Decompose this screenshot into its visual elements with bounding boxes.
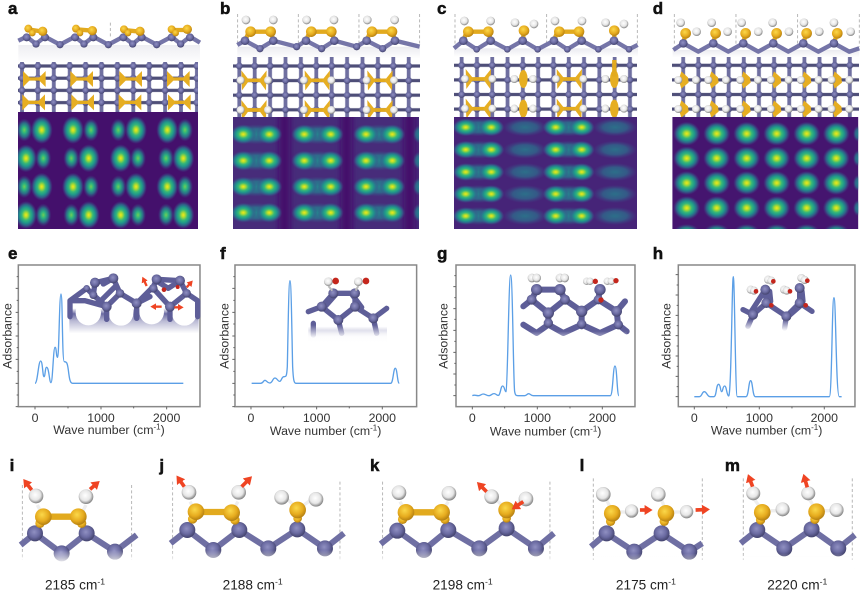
top view d bbox=[672, 57, 859, 118]
x axis title f: ) bbox=[377, 424, 381, 438]
frequency m: -1 bbox=[820, 577, 827, 587]
y axis title f: Adsorbance bbox=[217, 303, 231, 369]
arrows m bbox=[750, 480, 807, 487]
inset structure h bbox=[741, 273, 813, 341]
panel j: 2188 mode bbox=[158, 456, 344, 592]
x tick labels e: 0 bbox=[32, 411, 39, 425]
panel d: all single sites bbox=[653, 0, 863, 240]
y axis title g: Adsorbance bbox=[436, 303, 450, 369]
frequency i: -1 bbox=[97, 577, 105, 587]
frequency l: -1 bbox=[668, 577, 676, 587]
x tick labels e: 1000 bbox=[87, 411, 115, 425]
top view a bbox=[18, 62, 198, 112]
x axis title h: -1 bbox=[811, 423, 819, 432]
x axis title g: -1 bbox=[590, 424, 598, 433]
x tick labels g bbox=[469, 411, 616, 425]
panel m: 2220 mode bbox=[725, 456, 855, 592]
spectrum curve e bbox=[35, 294, 183, 383]
panel l: 2175 mode bbox=[580, 456, 703, 592]
label f: f bbox=[220, 244, 226, 263]
inset structure e bbox=[69, 270, 199, 338]
label g: g bbox=[437, 244, 447, 263]
frequency j: -1 bbox=[275, 577, 283, 587]
x tick labels g: 0 bbox=[469, 411, 476, 425]
frequency j: 2188 cm bbox=[223, 577, 275, 592]
label m: m bbox=[725, 456, 740, 475]
x tick labels h: 1000 bbox=[746, 411, 773, 425]
arrows l bbox=[640, 504, 703, 515]
spectrum curve g bbox=[472, 275, 619, 396]
panel f: IR spectrum bbox=[217, 244, 417, 438]
structure m bbox=[740, 478, 855, 575]
side view b bbox=[237, 14, 420, 58]
x tick labels h: 2000 bbox=[811, 411, 838, 425]
x tick labels h bbox=[691, 411, 838, 425]
y axis title h: Adsorbance bbox=[660, 303, 674, 369]
x axis title h: ) bbox=[818, 423, 822, 437]
panel i: 2185 mode bbox=[10, 456, 137, 592]
arrows i bbox=[27, 484, 95, 490]
panel k: 2198 mode bbox=[370, 456, 555, 592]
panel e: IR spectrum bbox=[1, 244, 200, 437]
x tick labels h: 0 bbox=[691, 411, 698, 425]
frequency k: 2198 cm bbox=[433, 577, 485, 592]
x tick labels f: 1000 bbox=[303, 411, 330, 425]
x axis title h: Wave number (cm bbox=[711, 423, 811, 437]
structure l bbox=[590, 478, 703, 575]
heat map b bbox=[233, 117, 419, 229]
x tick labels e bbox=[32, 411, 181, 425]
panel a: bare surface bbox=[8, 0, 200, 229]
label j: j bbox=[158, 456, 164, 475]
spectrum curve h bbox=[694, 277, 842, 397]
inset structure f bbox=[307, 273, 387, 347]
x tick labels e: 2000 bbox=[153, 411, 181, 425]
label h: h bbox=[653, 244, 663, 263]
frequency m: 2220 cm bbox=[767, 577, 820, 592]
panel h: IR spectrum bbox=[653, 244, 855, 437]
plot frame f bbox=[232, 265, 417, 409]
side view d bbox=[673, 14, 859, 57]
structure k bbox=[380, 482, 555, 570]
y axis title e: Adsorbance bbox=[1, 303, 15, 369]
label e: e bbox=[8, 244, 17, 263]
panel g: IR spectrum bbox=[436, 244, 635, 439]
panel c: mixed dimer and single sites bbox=[437, 0, 638, 229]
x axis title e: ) bbox=[161, 423, 165, 437]
spectrum curve f bbox=[252, 281, 399, 383]
x tick labels g: 1000 bbox=[524, 411, 551, 425]
x axis title g: Wave number (cm bbox=[490, 425, 590, 439]
x tick labels f: 2000 bbox=[369, 411, 396, 425]
heat map a bbox=[18, 112, 198, 229]
x axis title g: ) bbox=[597, 425, 601, 439]
heat map c bbox=[454, 117, 637, 229]
top view c bbox=[454, 57, 637, 119]
top view b bbox=[233, 57, 420, 120]
vibration modes row bbox=[10, 456, 855, 592]
plot frame h bbox=[676, 265, 855, 409]
arrows k bbox=[482, 487, 523, 506]
x tick labels f bbox=[248, 411, 396, 425]
side view a bbox=[18, 23, 200, 63]
side view c bbox=[454, 14, 638, 57]
arrows j bbox=[180, 481, 247, 487]
frequency i: 2185 cm bbox=[45, 577, 97, 592]
label k: k bbox=[370, 456, 380, 475]
x tick labels g: 2000 bbox=[589, 411, 616, 425]
x axis title f: -1 bbox=[370, 424, 378, 433]
structure i bbox=[20, 485, 137, 570]
panel b: dimer with hydrogen bbox=[220, 0, 425, 236]
frequency l: 2175 cm bbox=[616, 577, 668, 592]
label i: i bbox=[10, 456, 14, 475]
structure j bbox=[170, 482, 344, 570]
x axis title e: Wave number (cm bbox=[53, 423, 154, 437]
label l: l bbox=[580, 456, 584, 475]
heat map d bbox=[672, 117, 858, 229]
x tick labels f: 0 bbox=[248, 411, 255, 425]
x axis title e: -1 bbox=[154, 423, 161, 432]
plot frame e bbox=[16, 265, 200, 409]
frequency k: -1 bbox=[485, 577, 493, 587]
inset structure g bbox=[522, 271, 627, 350]
x axis title f: Wave number (cm bbox=[270, 424, 370, 438]
plot frame g bbox=[453, 265, 635, 409]
